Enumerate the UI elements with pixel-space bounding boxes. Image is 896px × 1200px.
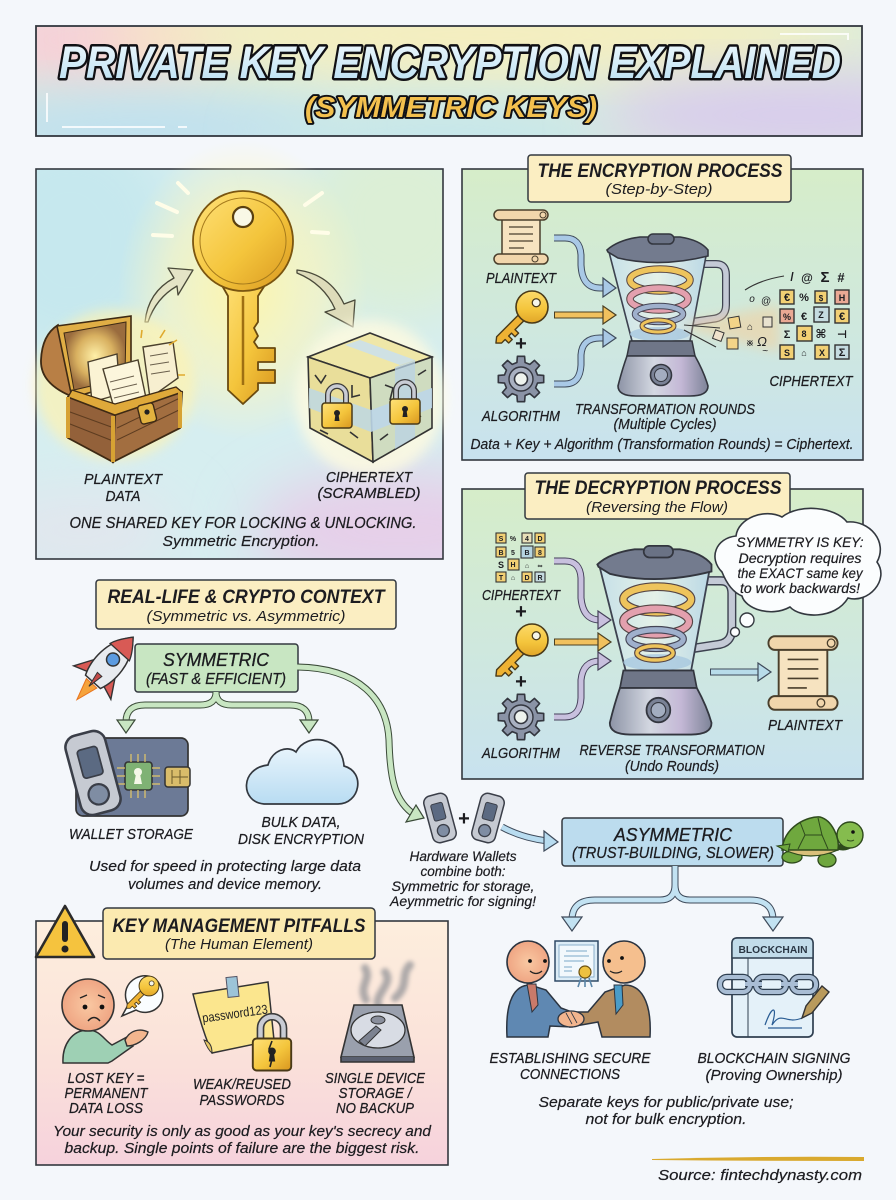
- heading: real-life and crypto context: REAL-LIFE & CRYPTO CONTEXT: [108, 587, 386, 608]
- label: ciphertext scrambled: [318, 469, 420, 502]
- caption: used for speed: [89, 858, 361, 893]
- icon: smoking hard drive: [341, 965, 414, 1062]
- icon: ciphertext grid: %: [799, 292, 809, 304]
- icon: ciphertext grid: %: [783, 312, 791, 322]
- icon: sad person with lost key: [62, 972, 163, 1063]
- arrow: asymmetric fork: [562, 866, 783, 931]
- callout: symmetry is key: [715, 508, 881, 636]
- icon: ciphertext mini grid: %: [510, 536, 517, 543]
- label: plus: +: [515, 601, 527, 623]
- icon: wallet card with chip: [63, 728, 190, 818]
- caption: security note: [53, 1123, 432, 1157]
- icon: ciphertext grid: Σ: [839, 347, 846, 359]
- box: asymmetric: [562, 818, 783, 866]
- label: ciphertext scrambled: CIPHERTEXT: [326, 469, 414, 486]
- box: symmetric: (FAST & EFFICIENT): [146, 671, 286, 688]
- heading: encryption process: [528, 155, 791, 202]
- icon: blockchain document: [720, 938, 829, 1037]
- label: ciphertext: CIPHERTEXT: [770, 373, 854, 390]
- label: plaintext: PLAINTEXT: [486, 270, 558, 287]
- icon: ciphertext mini grid: ∞: [538, 563, 542, 570]
- icon: cloud: [246, 740, 358, 804]
- label: plaintext data: DATA: [106, 488, 140, 505]
- icon: sticky note with broken lock: [193, 976, 291, 1070]
- panel: encryption process: [462, 155, 863, 460]
- arrow: key to cube: [297, 270, 355, 327]
- icon: ciphertext mini grid: S: [498, 560, 504, 570]
- icon: ciphertext mini grid: B: [524, 550, 530, 557]
- label: establishing secure connections: ESTABLISHING SECURE: [490, 1050, 651, 1067]
- arrow: blender to plaintext: [710, 663, 771, 681]
- callout: symmetry is key: Decryption requires: [738, 551, 862, 566]
- arrow: ciphertext to blender: [554, 561, 611, 629]
- icon: plaintext scroll: [494, 210, 548, 264]
- icon: sticky note with broken lock: password123: [201, 1001, 269, 1026]
- icon: ciphertext mini grid: H: [510, 562, 516, 569]
- label: wallet storage: WALLET STORAGE: [69, 826, 194, 843]
- icon: gear: [498, 694, 544, 740]
- caption: one shared key: [70, 515, 416, 550]
- label: blockchain signing: BLOCKCHAIN SIGNING: [698, 1050, 851, 1067]
- icon: ciphertext stream: o: [749, 294, 755, 305]
- icon: rocket: [58, 621, 152, 716]
- label: transformation rounds: [575, 401, 755, 433]
- label: blockchain signing: (Proving Ownership): [706, 1067, 842, 1084]
- text: hardware wallets note: Hardware Wallets: [410, 849, 517, 864]
- icon: ciphertext grid: ⌂: [801, 348, 807, 358]
- icon: ciphertext stream: ~: [762, 346, 768, 357]
- label: single device storage: NO BACKUP: [336, 1100, 414, 1117]
- panel: key management pitfalls: [36, 906, 448, 1165]
- heading: encryption process: (Step-by-Step): [606, 181, 712, 198]
- icon: ciphertext grid: #: [837, 270, 845, 285]
- caption: separate keys: [538, 1094, 794, 1128]
- label: bulk data: BULK DATA,: [262, 814, 340, 831]
- icon: ciphertext grid: 8: [801, 329, 807, 339]
- arrow: algorithm to blender: [554, 329, 616, 384]
- icon: blockchain document: BLOCKCHAIN: [738, 944, 808, 956]
- label: plus: +: [515, 333, 527, 355]
- heading: subtitle: (SYMMETRIC KEYS): [305, 91, 597, 124]
- panel: shared key concept: [30, 153, 446, 560]
- icon: ciphertext grid: Z: [818, 310, 824, 320]
- icon: handshake with certificate: [507, 941, 650, 1037]
- icon: ciphertext mini grid: D: [524, 575, 530, 582]
- icon: ciphertext mini grid: 5: [511, 550, 515, 557]
- label: plaintext: PLAINTEXT: [768, 717, 844, 734]
- caption: one shared key: ONE SHARED KEY FOR LOCKING & UNLOCKING.: [70, 515, 416, 532]
- icon: ciphertext mini grid: R: [537, 575, 543, 582]
- label: establishing secure connections: [490, 1050, 651, 1083]
- heading: decryption process: (Reversing the Flow): [586, 499, 728, 516]
- heading: decryption process: THE DECRYPTION PROCESS: [534, 478, 782, 499]
- label: lost key: [64, 1070, 149, 1117]
- text: hardware wallets note: Symmetric for storage,: [392, 879, 534, 894]
- label: lost key: PERMANENT: [64, 1085, 149, 1102]
- caption: security note: Your security is only as good as your key's secrecy and: [53, 1123, 432, 1140]
- icon: ciphertext grid: ⌘: [815, 327, 827, 341]
- source line: [652, 1157, 864, 1184]
- icon: blender: [597, 546, 732, 735]
- caption: separate keys: Separate keys for public/private use;: [538, 1094, 794, 1111]
- icon: key: [485, 284, 555, 354]
- icon: ciphertext mini grid: 8: [538, 550, 542, 557]
- heading: real-life and crypto context: [96, 580, 396, 629]
- label: reverse transformation: [580, 742, 765, 775]
- label: ciphertext scrambled: (SCRAMBLED): [318, 485, 420, 502]
- panel: decryption process: [462, 473, 881, 779]
- arrow: key to blender: [554, 633, 611, 651]
- callout: symmetry is key: the EXACT same key: [738, 566, 864, 581]
- label: lost key: DATA LOSS: [69, 1100, 143, 1117]
- icon: locked ciphertext cube: [295, 320, 445, 476]
- icon: ciphertext stream: Ω: [757, 334, 767, 349]
- label: plaintext data: [84, 471, 164, 505]
- icon: hardware wallets: +: [458, 808, 470, 830]
- icon: ciphertext grid: Σ: [784, 329, 791, 341]
- arrow: plaintext to blender: [554, 238, 616, 297]
- text: hardware wallets note: [389, 849, 536, 909]
- icon: turtle: [777, 817, 863, 867]
- caption: one shared key: Symmetric Encryption.: [162, 533, 320, 550]
- icon: gear: [498, 356, 544, 402]
- box: symmetric: [135, 644, 298, 692]
- icon: ciphertext grid: €: [784, 292, 790, 304]
- label: weak passwords: WEAK/REUSED: [193, 1076, 291, 1093]
- caption: security note: backup. Single points of failure are the biggest risk.: [64, 1140, 420, 1157]
- label: single device storage: [325, 1070, 426, 1117]
- icon: ciphertext grid: $: [819, 294, 824, 303]
- heading: key management pitfalls: [103, 908, 375, 959]
- heading: key management pitfalls: KEY MANAGEMENT PITFALLS: [112, 916, 366, 937]
- heading: encryption process: THE ENCRYPTION PROCESS: [538, 161, 783, 182]
- icon: ciphertext mini grid: D: [537, 536, 543, 543]
- icon: glowing golden key: [118, 140, 368, 440]
- arrow: algorithm to blender: [554, 652, 611, 717]
- icon: ciphertext mini grid: ⌂: [525, 563, 529, 570]
- text: hardware wallets note: combine both:: [420, 864, 506, 879]
- caption: encryption formula: Data + Key + Algorithm (Transformation Rounds) = Ciphertext.: [470, 436, 854, 453]
- caption: used for speed: Used for speed in protecting large data: [89, 858, 361, 875]
- title banner: [35, 25, 863, 137]
- box: symmetric: SYMMETRIC: [163, 650, 270, 670]
- label: plus: +: [515, 671, 527, 693]
- source line: Source: fintechdynasty.com: [658, 1167, 862, 1184]
- icon: ciphertext grid: ⊣: [837, 329, 847, 341]
- caption: used for speed: volumes and device memory.: [128, 876, 322, 893]
- label: ciphertext: CIPHERTEXT: [482, 587, 562, 604]
- icon: ciphertext grid: /: [790, 270, 794, 284]
- label: bulk data: [238, 814, 364, 848]
- heading: main title: PRIVATE KEY ENCRYPTION EXPLAINED: [59, 37, 841, 88]
- box: asymmetric: ASYMMETRIC: [613, 825, 733, 845]
- icon: ciphertext mini grid: T: [499, 575, 504, 582]
- icon: ciphertext mini grid: 4: [525, 536, 529, 543]
- icon: ciphertext grid: €: [801, 311, 807, 323]
- icon: ciphertext grid: S: [784, 348, 790, 358]
- label: single device storage: SINGLE DEVICE: [325, 1070, 426, 1087]
- label: weak passwords: [193, 1076, 291, 1109]
- label: reverse transformation: REVERSE TRANSFORMATION: [580, 742, 765, 759]
- heading: decryption process: [525, 473, 790, 519]
- label: algorithm: ALGORITHM: [481, 408, 560, 425]
- heading: key management pitfalls: (The Human Element): [165, 936, 313, 953]
- icon: ciphertext grid: €: [839, 311, 845, 323]
- icon: blender: [607, 234, 726, 396]
- label: bulk data: DISK ENCRYPTION: [238, 831, 364, 848]
- label: weak passwords: PASSWORDS: [200, 1092, 284, 1109]
- icon: ciphertext grid: Σ: [820, 269, 830, 286]
- text: hardware wallets note: Aeymmetric for signing!: [389, 894, 536, 909]
- arrow: chest to key: [145, 268, 193, 322]
- heading: real-life and crypto context: (Symmetric vs. Asymmetric): [146, 608, 346, 625]
- icon: ciphertext mini grid: [496, 533, 545, 582]
- icon: ciphertext grid: X: [819, 348, 825, 358]
- icon: treasure chest with scrolls: [35, 310, 195, 462]
- label: blockchain signing: [698, 1050, 851, 1084]
- label: reverse transformation: (Undo Rounds): [625, 758, 719, 775]
- icon: warning triangle: [36, 906, 94, 957]
- label: single device storage: STORAGE /: [338, 1085, 413, 1102]
- arrow: key to blender: [554, 306, 616, 324]
- arrow: hardware wallets to asymmetric: [502, 827, 558, 851]
- label: establishing secure connections: CONNECTIONS: [520, 1066, 620, 1083]
- icon: ciphertext stream: ※: [746, 338, 754, 349]
- label: algorithm: ALGORITHM: [481, 745, 560, 762]
- icon: ciphertext stream: @: [761, 296, 771, 307]
- icon: ciphertext grid: [780, 269, 849, 359]
- label: transformation rounds: (Multiple Cycles): [614, 416, 716, 433]
- label: lost key: LOST KEY =: [68, 1070, 145, 1087]
- icon: plaintext scroll: [768, 636, 838, 710]
- arrow: symmetric to hardware wallets: [297, 667, 424, 822]
- icon: ciphertext mini grid: S: [499, 536, 504, 543]
- callout: symmetry is key: SYMMETRY IS KEY:: [736, 535, 864, 550]
- label: plaintext data: PLAINTEXT: [84, 471, 164, 488]
- icon: ciphertext mini grid: ⌂: [511, 575, 515, 582]
- arrow: symmetric fork: [117, 692, 318, 733]
- icon: key: [485, 617, 555, 687]
- icon: ciphertext mini grid: B: [498, 550, 504, 557]
- label: transformation rounds: TRANSFORMATION ROUNDS: [575, 401, 755, 418]
- icon: ciphertext grid: @: [801, 271, 813, 285]
- icon: ciphertext stream: ⌂: [747, 322, 753, 333]
- icon: ciphertext grid: H: [839, 293, 845, 303]
- box: asymmetric: (TRUST-BUILDING, SLOWER): [572, 845, 774, 862]
- icon: ciphertext stream: [684, 276, 784, 357]
- caption: separate keys: not for bulk encryption.: [586, 1111, 746, 1128]
- icon: hardware wallets: [422, 792, 506, 844]
- callout: symmetry is key: to work backwards!: [740, 581, 860, 596]
